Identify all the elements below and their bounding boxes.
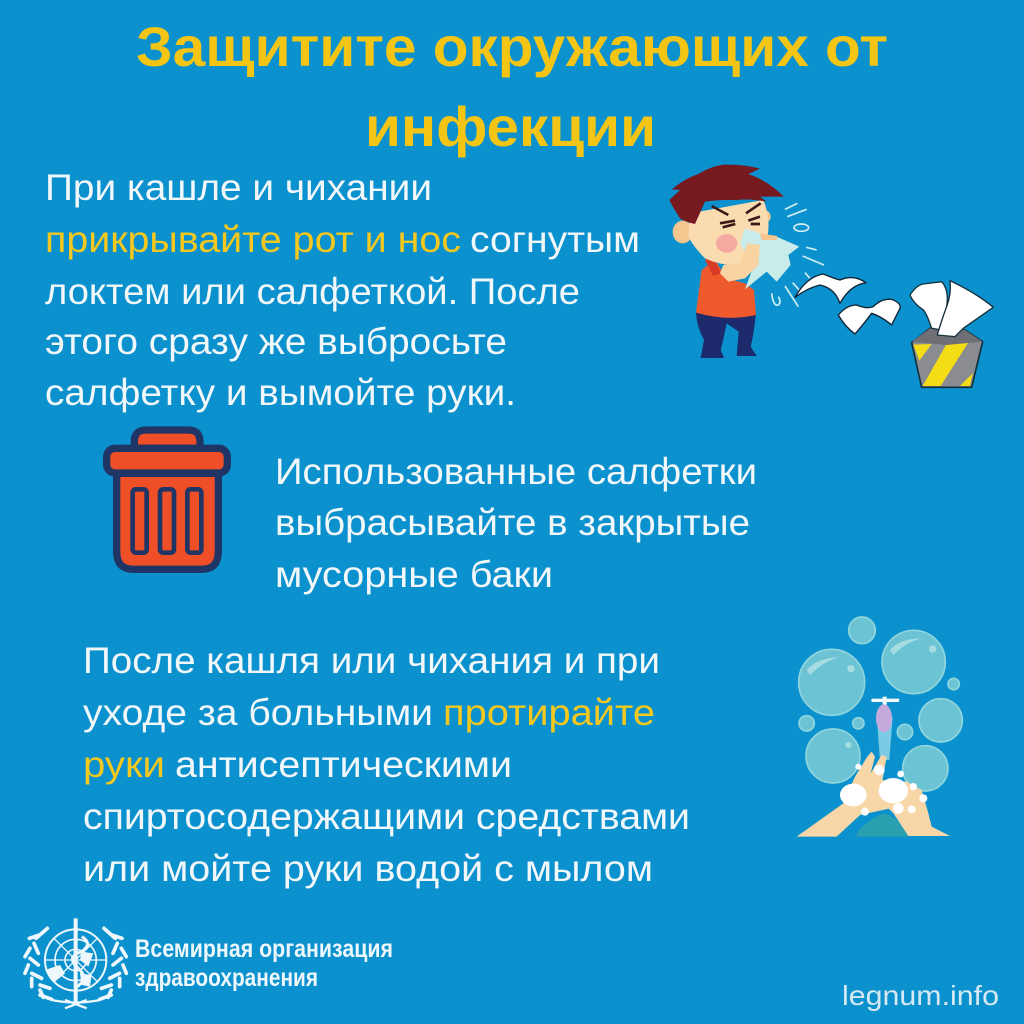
logo: organisation name	[135, 935, 393, 992]
water pool	[855, 813, 908, 837]
text block: used tissues: мусорные баки	[275, 554, 553, 595]
text block: hand hygiene: или мойте руки водой с мылом	[83, 848, 653, 889]
text block: cough and sneeze: локтем или салфеткой. После	[45, 271, 580, 312]
title: инфекции	[365, 95, 656, 158]
text block: hand hygiene: спиртосодержащими средствами	[83, 796, 690, 837]
lid	[107, 448, 227, 473]
flying tissue 2	[838, 299, 900, 334]
icon: trash bin	[107, 430, 227, 569]
text block: hand hygiene: руки	[83, 744, 165, 785]
bubble highlights	[807, 638, 936, 748]
eyes	[712, 203, 761, 227]
laurel left	[25, 928, 52, 999]
text block: cough and sneeze: согнутым	[470, 219, 640, 260]
staff and serpent	[70, 918, 82, 1002]
globe	[45, 929, 106, 991]
text block: hand hygiene: После кашля или чихания и при	[83, 640, 660, 681]
text block: used tissues	[275, 451, 757, 595]
hair	[669, 165, 784, 224]
text block: cough and sneeze: этого сразу же выбросьте	[45, 321, 507, 362]
water stream	[877, 717, 893, 760]
title: Защитите окружающих от	[136, 15, 888, 78]
bubbles	[799, 617, 962, 791]
text block: hand hygiene: уходе за больными	[83, 692, 433, 733]
text block: cough and sneeze: салфетку и вымойте руки.	[45, 372, 516, 413]
watermark: legnum.info	[842, 980, 999, 1011]
logo: WHO emblem	[25, 918, 126, 1008]
text block: hand hygiene: антисептическими	[175, 744, 512, 785]
sneeze lines	[785, 203, 824, 307]
text block: cough and sneeze: прикрывайте рот и нос	[45, 219, 461, 260]
pants	[696, 313, 757, 358]
tissue at nose	[740, 228, 799, 289]
slots	[133, 489, 147, 553]
flying tissue 1	[795, 274, 866, 303]
lid handle	[134, 430, 200, 448]
text block: cough and sneeze	[45, 167, 640, 413]
soap foam	[840, 764, 927, 816]
logo: organisation name: Всемирная организация	[135, 935, 393, 963]
continents	[45, 952, 93, 987]
head	[673, 221, 693, 243]
logo: organisation name: здравоохранения	[135, 964, 318, 992]
tissues from box	[910, 282, 947, 330]
arm	[720, 243, 760, 282]
icon: hand washing with bubbles	[797, 617, 962, 837]
text block: cough and sneeze: При кашле и чихании	[45, 167, 432, 208]
faucet	[871, 699, 899, 702]
title	[136, 15, 888, 158]
text block: used tissues: выбрасывайте в закрытые	[275, 502, 750, 543]
laurel right	[100, 928, 126, 999]
text block: used tissues: Использованные салфетки	[275, 451, 757, 492]
text block: hand hygiene: протирайте	[443, 692, 655, 733]
left hand	[797, 752, 890, 837]
bin body	[117, 473, 218, 569]
shirt	[696, 260, 756, 318]
text block: hand hygiene	[83, 640, 690, 889]
right hand	[877, 780, 950, 836]
tissue box	[912, 328, 983, 387]
icon: sneezing person with tissues	[669, 165, 993, 387]
